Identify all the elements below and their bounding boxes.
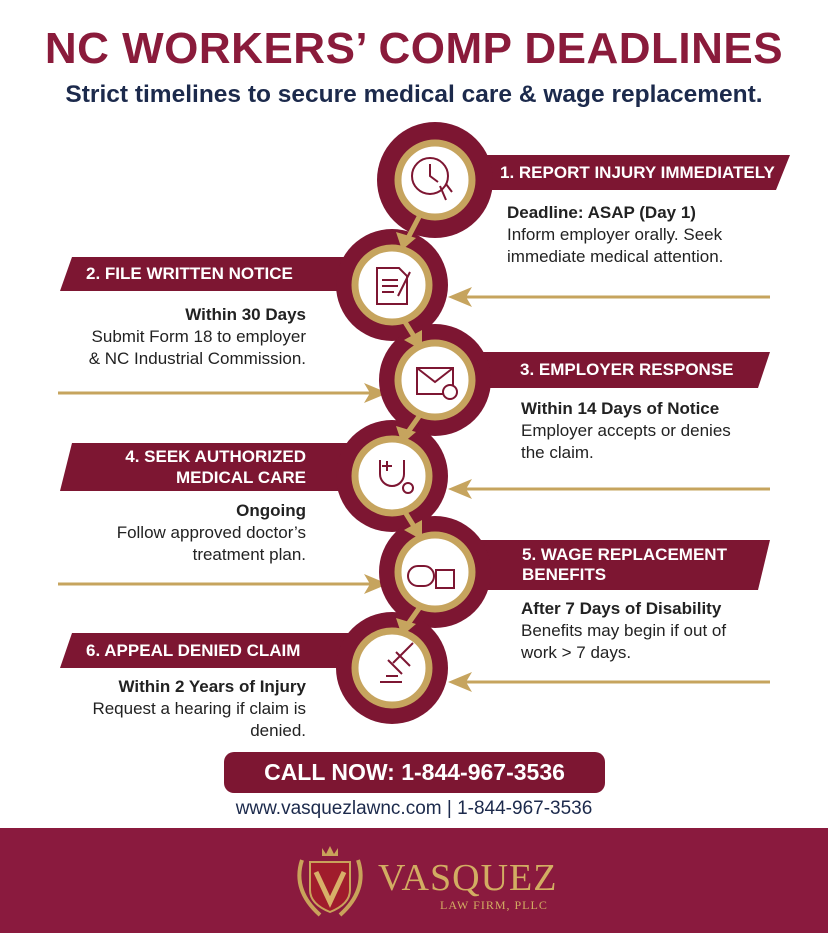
text 3 xyxy=(521,399,731,462)
text 5: After 7 Days of Disability xyxy=(521,599,721,618)
banner 6: 6. APPEAL DENIED CLAIM xyxy=(86,641,300,660)
text 1: immediate medical attention. xyxy=(507,247,723,266)
gold arrows xyxy=(58,287,770,692)
text 3: the claim. xyxy=(521,443,594,462)
banner 5: BENEFITS xyxy=(522,565,606,584)
footer xyxy=(0,828,828,933)
connecting arrows xyxy=(396,215,422,636)
logo emblem xyxy=(297,846,363,916)
banner 3: 3. EMPLOYER RESPONSE xyxy=(520,360,734,379)
text 4: Follow approved doctor’s xyxy=(117,523,306,542)
banner 4: MEDICAL CARE xyxy=(176,468,306,487)
text 1 xyxy=(507,203,723,266)
text 6: denied. xyxy=(250,721,306,740)
icons xyxy=(377,158,457,682)
text 6: Request a hearing if claim is xyxy=(92,699,306,718)
text 4: treatment plan. xyxy=(193,545,306,564)
text 2: Submit Form 18 to employer xyxy=(92,327,306,346)
text 2: Within 30 Days xyxy=(185,305,306,324)
text 5 xyxy=(521,599,726,662)
text 4: Ongoing xyxy=(236,501,306,520)
text 1: Inform employer orally. Seek xyxy=(507,225,722,244)
circles xyxy=(336,122,493,724)
text 3: Employer accepts or denies xyxy=(521,421,731,440)
text 4 xyxy=(117,501,306,564)
call now button xyxy=(224,752,605,793)
banner 5: 5. WAGE REPLACEMENT xyxy=(522,545,727,564)
footer: LAW FIRM, PLLC xyxy=(440,898,548,912)
text 3: Within 14 Days of Notice xyxy=(521,399,719,418)
banner 2: 2. FILE WRITTEN NOTICE xyxy=(86,264,293,283)
text 5: work > 7 days. xyxy=(521,643,631,662)
banners xyxy=(60,155,790,668)
logo text: VASQUEZ xyxy=(378,857,557,899)
text 6 xyxy=(92,677,306,740)
title: NC WORKERS’ COMP DEADLINES xyxy=(45,24,783,73)
subtitle: Strict timelines to secure medical care & wage replacement. xyxy=(65,81,763,108)
text 1: Deadline: ASAP (Day 1) xyxy=(507,203,696,222)
banner 5 xyxy=(522,545,727,584)
banner text 1: 1. REPORT INJURY IMMEDIATELY xyxy=(500,163,775,182)
banner 4 xyxy=(125,447,306,487)
call now button: CALL NOW: 1-844-967-3536 xyxy=(264,759,565,785)
text 5: Benefits may begin if out of xyxy=(521,621,726,640)
text 6: Within 2 Years of Injury xyxy=(118,677,306,696)
banner 4: 4. SEEK AUTHORIZED xyxy=(125,447,306,466)
text 2: & NC Industrial Commission. xyxy=(89,349,306,368)
website line: www.vasquezlawnc.com | 1-844-967-3536 xyxy=(236,798,592,819)
text 2 xyxy=(89,305,306,368)
